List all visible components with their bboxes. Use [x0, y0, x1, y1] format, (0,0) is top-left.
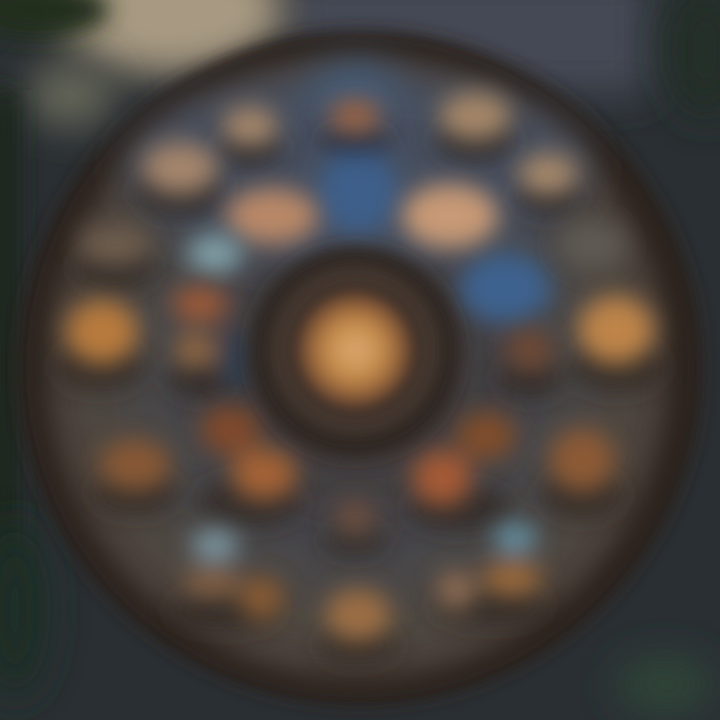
shadows under compartments: [56, 118, 664, 663]
central glow: [295, 290, 415, 410]
upper disk blue tint: [128, 63, 588, 265]
inner left compartments: [172, 286, 554, 390]
upper tan compartments: [142, 92, 578, 195]
bottom compartments: [182, 523, 542, 641]
top blue compartment: [318, 130, 398, 234]
lower orange compartments: [99, 406, 615, 536]
peach compartments: [226, 184, 498, 248]
orange left and right compartments: [66, 296, 654, 364]
central hub ring: [249, 246, 461, 458]
light blue compartment left: [187, 234, 243, 274]
right blue compartment: [459, 252, 551, 324]
dim side compartments: [79, 221, 626, 269]
wheel disk: [46, 56, 670, 680]
